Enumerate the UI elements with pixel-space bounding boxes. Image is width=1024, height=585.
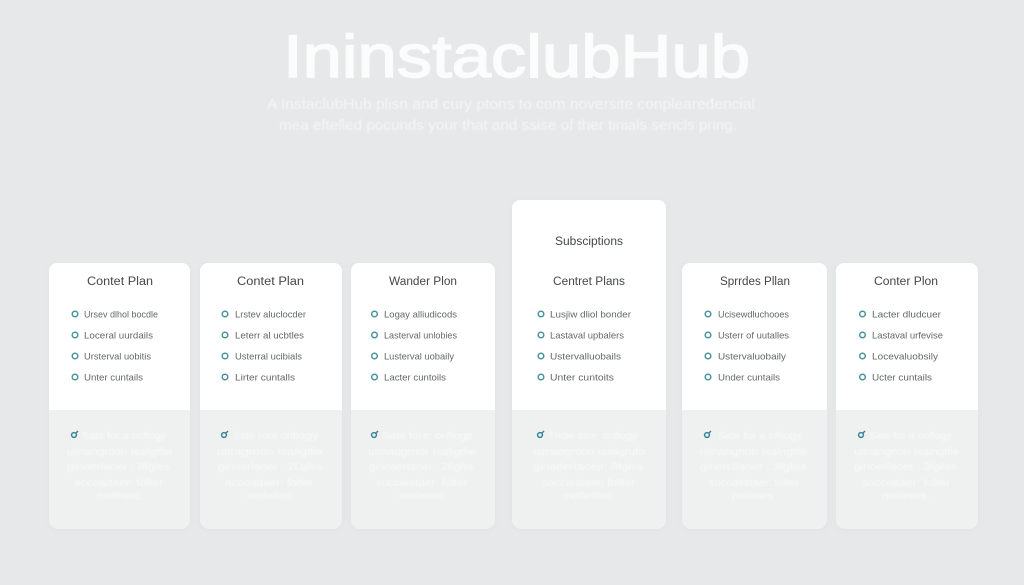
card 3 description bbox=[368, 431, 477, 502]
card 2 description: uitragroon Isaligtlia bbox=[217, 447, 324, 458]
card 6 icon bbox=[859, 431, 865, 437]
card 5 feature list: Under cuntails bbox=[718, 372, 780, 384]
card 5 feature list: Ustervaluobaily bbox=[718, 352, 786, 362]
card 4 feature list bbox=[538, 310, 631, 384]
subtitle bbox=[267, 97, 755, 134]
card 5 heading: Sprrdes Pllan bbox=[720, 276, 790, 288]
card 6 feature list: Lastaval urfevise bbox=[872, 330, 943, 342]
card 2 description: Sate rore orifiogjy bbox=[233, 431, 318, 442]
card 1 feature list bbox=[72, 310, 158, 384]
card 5 description: Sate for a sifliogjr bbox=[718, 431, 803, 442]
card 4 description: metlietties. bbox=[563, 491, 614, 502]
card 3 description: ginnaertaoer : 26glss bbox=[369, 462, 474, 473]
card 1 description bbox=[67, 431, 173, 502]
card 2 description: accoadaer: folter bbox=[225, 478, 314, 489]
card 2 description: netleties. bbox=[247, 491, 295, 502]
card 4 heading: Centret Plans bbox=[553, 276, 625, 288]
card 4 description: uimaegroon Isaligrufo bbox=[533, 447, 646, 458]
card 4 description: socciestaer: folller bbox=[542, 478, 636, 489]
card 2 feature list bbox=[222, 310, 306, 384]
card 3 description: uimaogrnor Isaligtlie bbox=[368, 447, 477, 458]
card 3 feature list: Logay alliudicods bbox=[384, 310, 457, 320]
card 5 description bbox=[700, 431, 809, 502]
card 6 description: Sate for a orifiogjr bbox=[869, 431, 953, 442]
card 4 feature list: Lusjiw dliol bonder bbox=[550, 310, 631, 320]
card 1 feature list: Ursev dlhol bocdle bbox=[84, 310, 158, 320]
card 6 feature list: Lacter dludcuer bbox=[872, 310, 941, 320]
card 2 feature list: Usterral ucibials bbox=[235, 352, 302, 362]
subtitle: A InstaclubHub plisn and cury ptons to com noversite conpleaređencial bbox=[267, 97, 755, 113]
panel: plan card 5 bbox=[682, 263, 827, 529]
card 6 description: uiinangnon Isaingtlie bbox=[854, 447, 959, 458]
card 6 feature list: Ucter cuntails bbox=[872, 372, 932, 384]
card 1 description: ginoerlaoer : 8fgles bbox=[67, 462, 170, 473]
card 1 feature list: Loceral uurdails bbox=[84, 330, 153, 342]
card 1 feature list: Ursterval uobitis bbox=[84, 352, 151, 362]
card 5 description: succdestaer: folter bbox=[709, 478, 800, 489]
card 6 description: socciataer: folter bbox=[862, 478, 951, 489]
card 3 feature list: Lacter cuntoils bbox=[384, 372, 446, 384]
card 5 description: netleties. bbox=[732, 491, 776, 502]
card 1 description: accoadaer: folter bbox=[74, 478, 164, 489]
card 6 description bbox=[854, 431, 959, 502]
card 3 description: Sate fore: orifiogjr bbox=[382, 431, 474, 442]
card 3 heading: Wander Plon bbox=[389, 276, 457, 288]
card 3 feature list: Lasterval unlobies bbox=[384, 330, 457, 342]
card 2 heading: Contet Plan bbox=[237, 276, 304, 288]
subtitle: mea efteſled pocunds your that and ssise of ther tinials sencls pring. bbox=[279, 118, 737, 134]
card 5 feature list bbox=[705, 310, 789, 384]
panel: plan card 6 bbox=[836, 263, 978, 529]
card 6 heading: Conter Plon bbox=[874, 276, 938, 288]
card 3 feature list bbox=[372, 310, 457, 384]
card 4 feature list: Unter cuntoits bbox=[550, 372, 614, 384]
card 3 description: succiestaer: folter bbox=[376, 478, 469, 489]
panel: plan card 4 (highlighted) bbox=[512, 200, 666, 529]
panel: plan card 1 bbox=[49, 263, 190, 529]
card 4 feature list: Ustervalluobails bbox=[550, 352, 621, 362]
card 2 icon bbox=[222, 431, 228, 437]
card 5 feature list: Ucisewdluchooes bbox=[718, 310, 789, 320]
card 4 description: ginaeertaoejr: 8fglss bbox=[533, 462, 643, 473]
card 4 description bbox=[533, 431, 646, 502]
card 2 description: ginoerlaoer : 2Lglss bbox=[218, 462, 322, 473]
card 2 feature list: Leterr al ucbtles bbox=[235, 330, 304, 342]
card 6 feature list: Locevaluobsily bbox=[872, 352, 938, 362]
card 1 icon bbox=[72, 431, 78, 437]
card 5 description: uiinangnon Isalngtlie bbox=[700, 447, 809, 458]
card 2 description bbox=[217, 431, 324, 502]
card 6 feature list bbox=[860, 310, 943, 384]
card 1 description: metleties. bbox=[97, 491, 143, 502]
card 3 icon bbox=[372, 431, 378, 437]
card 3 feature list: Lusterval uobaily bbox=[384, 352, 454, 362]
panel: plan card 3 bbox=[351, 263, 495, 529]
panel: plan card 2 bbox=[200, 263, 342, 529]
card 6 description: netlieties. bbox=[882, 491, 930, 502]
card 4 feature list: Lastaval upbalers bbox=[550, 330, 624, 342]
card 1 feature list: Unter cuntails bbox=[84, 372, 143, 384]
card 6 description: ginoerlaoer : 3fgliss bbox=[854, 462, 957, 473]
card 2 feature list: Lrstev aluclocder bbox=[235, 310, 306, 320]
title: IninstaclubHub bbox=[283, 23, 750, 90]
card 5 icon bbox=[705, 431, 711, 437]
card 4 description: Tnoie tore: orifiogjr bbox=[548, 431, 639, 442]
card 1 heading: Contet Plan bbox=[87, 276, 153, 288]
card 4 badge label: Subsciptions bbox=[555, 236, 623, 248]
card 5 feature list: Usterr of uutalles bbox=[718, 330, 789, 342]
card 5 description: ginerctlaoer : 3fgliss bbox=[700, 462, 807, 473]
card 1 description: Sate for a orifiogjr bbox=[82, 431, 168, 442]
card 3 description: metleties. bbox=[399, 491, 446, 502]
card 1 description: uiinangroon Isaligtlia bbox=[67, 447, 173, 458]
card 2 feature list: Lirter cuntalls bbox=[235, 372, 295, 384]
card 4 icon bbox=[538, 431, 544, 437]
